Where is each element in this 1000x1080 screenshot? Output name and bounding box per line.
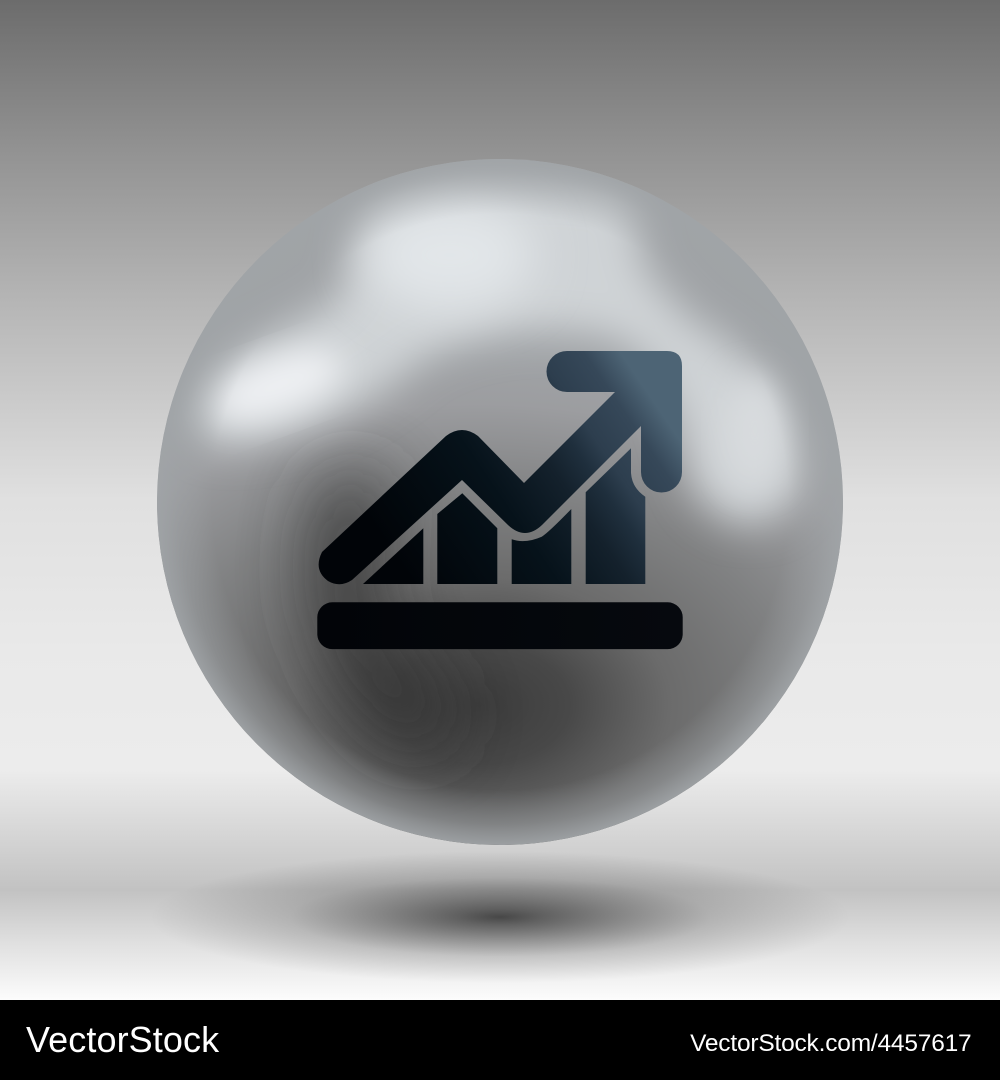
- sphere: [150, 150, 850, 850]
- floor shadow: [150, 851, 850, 983]
- left highlight: [209, 338, 346, 433]
- dark crescent lower left: [344, 505, 420, 715]
- brand name: VectorStock: [26, 1018, 219, 1060]
- image id: VectorStock.com/4457617: [690, 1030, 972, 1056]
- sphere base: [157, 254, 843, 845]
- bar 2: [437, 493, 497, 584]
- right highlight: [741, 369, 794, 462]
- top highlight: [365, 200, 535, 310]
- baseline: [317, 602, 683, 649]
- icon: rising chart with arrow: [317, 351, 683, 649]
- arrow line and head: [319, 351, 682, 584]
- watermark footer bar: [0, 1000, 1000, 1080]
- rim light: [157, 159, 843, 845]
- bar 3: [512, 509, 571, 584]
- main light band: [189, 182, 805, 524]
- bar 1: [363, 528, 423, 584]
- bar 4: [586, 448, 645, 584]
